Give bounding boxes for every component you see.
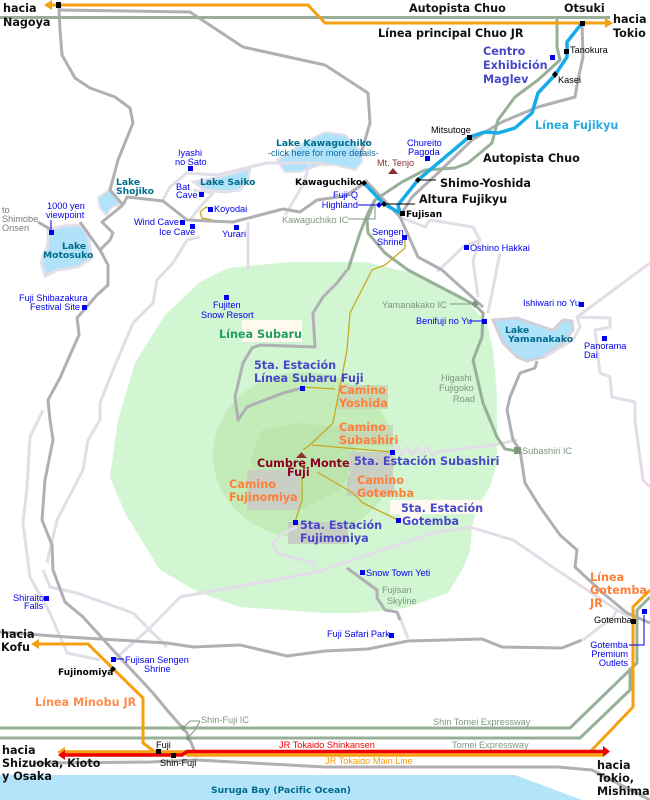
Tokaido Shinkansen bbox=[58, 746, 610, 760]
hacia Tokio top: Tokio bbox=[613, 27, 646, 40]
5ta Subaru: 5ta. Estación bbox=[254, 359, 336, 372]
icon: Tanokura station bbox=[564, 49, 569, 54]
Shin Tomei Expressway: Shin Tomei Expressway bbox=[433, 717, 531, 727]
Fuji foothills green area bbox=[110, 262, 497, 613]
leader lines bbox=[51, 180, 644, 738]
Autopista Chuo top: Autopista Chuo bbox=[409, 2, 506, 15]
Camino Gotemba: Gotemba bbox=[357, 487, 414, 500]
Lake Motosuko: Motosuko bbox=[43, 250, 93, 261]
Bat Cave: Bat bbox=[176, 182, 190, 192]
Fujisan Skyline: Skyline bbox=[387, 596, 417, 606]
Sengen Shrine: Shrine bbox=[377, 237, 404, 247]
Kawaguchiko IC: Kawaguchiko IC bbox=[282, 215, 349, 225]
Fujiten: Fujiten bbox=[213, 300, 241, 310]
Shin-Fuji station: Shin-Fuji bbox=[160, 758, 196, 768]
Linea Gotemba: Gotemba bbox=[590, 584, 647, 597]
Lake Yamanakako: Lake bbox=[505, 325, 529, 336]
Linea Fujikyu: Línea Fujikyu bbox=[535, 119, 618, 132]
Yurari: Yurari bbox=[222, 229, 246, 239]
Higashi Fujigoko Road: Road bbox=[453, 394, 475, 404]
Lake Yamanakako: Yamanakako bbox=[507, 334, 573, 345]
lake Kawaguchiko bbox=[277, 132, 362, 172]
Subashiri IC: Subashiri IC bbox=[522, 446, 572, 456]
5ta Gotemba: 5ta. Estación bbox=[401, 502, 483, 515]
Fujisan Skyline: Fujisan bbox=[382, 585, 412, 595]
icon: Mitsutoge station bbox=[467, 135, 472, 140]
Gotemba Premium Outlets: Gotemba bbox=[590, 640, 629, 650]
Ice Cave: Ice Cave bbox=[159, 227, 195, 237]
Chureito Pagoda: Chureito bbox=[407, 138, 442, 148]
Panorama Dai: Panorama bbox=[584, 341, 627, 351]
hacia Tokio top: hacia bbox=[613, 13, 647, 26]
icon: Gotemba station bbox=[631, 619, 636, 624]
hacia Kofu: hacia bbox=[1, 628, 35, 641]
Fujikyu line bbox=[364, 23, 582, 213]
icon: Fujisan station bbox=[400, 211, 405, 216]
labels: places bbox=[2, 138, 629, 766]
Linea Gotemba: JR bbox=[589, 597, 603, 610]
lake Yamanakako bbox=[493, 318, 573, 361]
Lake Shojiko: Shojiko bbox=[116, 186, 154, 197]
Fuji Shibazakura: Fuji Shibazakura bbox=[19, 293, 88, 303]
Camino Fujinomiya: Camino bbox=[229, 478, 276, 491]
Sengen Shrine: Sengen bbox=[372, 227, 404, 237]
hacia Shizuoka: Shizuoka, Kioto bbox=[2, 757, 101, 770]
Tanokura station: Tanokura bbox=[570, 45, 609, 55]
Shin-Fuji IC: Shin-Fuji IC bbox=[201, 715, 249, 725]
Camino Fujinomiya: Fujinomiya bbox=[229, 491, 298, 504]
Benifuji no Yu: Benifuji no Yu bbox=[416, 316, 472, 326]
Cumbre Monte Fuji: Fuji bbox=[287, 466, 310, 479]
icon: Mt. Tenjo peak bbox=[388, 168, 398, 174]
Altura Fujikyu: Altura Fujikyu bbox=[419, 193, 507, 206]
Fuji Safari Park: Fuji Safari Park bbox=[327, 629, 390, 639]
Lake Shojiko: Lake bbox=[116, 177, 140, 188]
hacia Shizuoka: y Osaka bbox=[2, 770, 52, 783]
Shiraito Falls: Shiraito bbox=[13, 593, 44, 603]
label background patches bbox=[242, 320, 483, 544]
Iyashi no Sato: Iyashi bbox=[178, 148, 202, 158]
JR Tokaido Shinkansen: JR Tokaido Shinkansen bbox=[279, 740, 375, 750]
hacia Tokio Mishima: hacia bbox=[597, 759, 631, 772]
Camino Subashiri: Camino bbox=[339, 421, 386, 434]
Bat Cave: Cave bbox=[176, 190, 197, 200]
Linea principal Chuo: Línea principal Chuo JR bbox=[378, 27, 524, 40]
labels: road names bbox=[201, 215, 572, 750]
hacia Nagoya: Nagoya bbox=[3, 16, 50, 29]
Higashi Fujigoko Road: Higashi bbox=[441, 373, 472, 383]
hacia Kofu: Kofu bbox=[1, 641, 30, 654]
hiking trails bbox=[200, 207, 405, 522]
Gotemba station: Gotemba bbox=[594, 615, 633, 625]
Lake Kawaguchiko: Lake Kawaguchiko bbox=[276, 138, 372, 149]
hacia Shizuoka: hacia bbox=[2, 744, 36, 757]
Higashi Fujigoko Road: Fujigoko bbox=[439, 383, 474, 393]
hacia Tokio Mishima: Mishima bbox=[597, 785, 650, 798]
Linea Gotemba: Línea bbox=[590, 571, 624, 584]
lake Saiko bbox=[194, 168, 250, 192]
icon: black diamonds bbox=[110, 71, 558, 672]
Suruga Bay water bbox=[0, 775, 582, 800]
Chureito Pagoda: Pagoda bbox=[408, 147, 441, 157]
summit zone bbox=[250, 423, 358, 510]
icon: blue diamond bbox=[376, 202, 382, 208]
Mitsutoge station: Mitsutoge bbox=[431, 125, 471, 135]
Gotemba Premium Outlets: Outlets bbox=[599, 658, 628, 668]
Suruga Bay: Suruga Bay (Pacific Ocean) bbox=[211, 785, 351, 796]
Chuo JR main line bbox=[44, 0, 613, 28]
1000 yen viewpoint: viewpoint bbox=[46, 210, 85, 220]
Panorama Dai: Dai bbox=[584, 350, 598, 360]
labels: stations bbox=[58, 45, 633, 768]
Yamanakako IC: Yamanakako IC bbox=[382, 300, 447, 310]
icon: blue place markers bbox=[44, 55, 647, 662]
Otsuki: Otsuki bbox=[564, 2, 605, 15]
labels: lakes bbox=[43, 138, 573, 796]
JR Tokaido Main Line: JR Tokaido Main Line bbox=[325, 756, 413, 766]
Wind Cave: Wind Cave bbox=[134, 217, 179, 227]
Tokaido main line bbox=[57, 747, 604, 757]
5ta Gotemba: Gotemba bbox=[402, 515, 459, 528]
Snow Town Yeti: Snow Town Yeti bbox=[366, 568, 430, 578]
Lake Saiko: Lake Saiko bbox=[200, 177, 256, 188]
5ta Subashiri: 5ta. Estación Subashiri bbox=[354, 455, 499, 468]
to Shimobe Onsen: Onsen bbox=[2, 223, 29, 233]
Fujiten: Snow Resort bbox=[201, 310, 254, 320]
Mt Tenjo: Mt. Tenjo bbox=[377, 158, 414, 168]
Centro Maglev: Maglev bbox=[483, 73, 529, 86]
Shiraito Falls: Falls bbox=[24, 601, 44, 611]
Fujisan Sengen Shrine: Fujisan Sengen bbox=[125, 655, 189, 665]
Fujisan station: Fujisan bbox=[406, 210, 442, 220]
Oshino Hakkai: Oshino Hakkai bbox=[470, 243, 530, 253]
Kasei station: Kasei bbox=[558, 75, 581, 85]
to Shimobe Onsen: Shimobe bbox=[2, 214, 38, 224]
hacia Nagoya: hacia bbox=[3, 2, 37, 15]
Shimo-Yoshida: Shimo-Yoshida bbox=[440, 177, 531, 190]
icon: Otsuki station bbox=[580, 21, 585, 26]
Fujisan Sengen Shrine: Shrine bbox=[144, 664, 171, 674]
Camino Gotemba: Camino bbox=[357, 474, 404, 487]
icon: IC markers bbox=[180, 300, 521, 741]
lake Shojiko bbox=[98, 189, 120, 215]
Cumbre Monte Fuji: Cumbre Monte bbox=[257, 457, 350, 470]
Ishiwari no Yu: Ishiwari no Yu bbox=[523, 298, 580, 308]
Fujinomiya station: Fujinomiya bbox=[58, 668, 113, 678]
Camino Yoshida: Camino bbox=[339, 384, 386, 397]
Centro Maglev: Centro bbox=[483, 45, 526, 58]
to Shimobe Onsen: to bbox=[2, 205, 10, 215]
Autopista Chuo lower: Autopista Chuo bbox=[483, 152, 580, 165]
Fuji-Q Highland: Highland bbox=[322, 200, 358, 210]
icon: Nagoya line square bbox=[56, 2, 61, 8]
Fuji Shibazakura: Festival Site bbox=[30, 302, 80, 312]
Lake Motosuko: Lake bbox=[62, 241, 86, 252]
Centro Maglev: Exhibición bbox=[483, 59, 548, 72]
minor roads bbox=[23, 163, 650, 660]
Camino Subashiri: Subashiri bbox=[339, 434, 398, 447]
5ta Fujinomiya: 5ta. Estación bbox=[300, 519, 382, 532]
icon: Fuji summit bbox=[296, 452, 307, 458]
Gotemba JR line bbox=[590, 590, 650, 752]
Gotemba Premium Outlets: Premium bbox=[591, 649, 628, 659]
icon: Fuji station bbox=[156, 749, 161, 754]
Camino Yoshida: Yoshida bbox=[338, 397, 388, 410]
Iyashi no Sato: no Sato bbox=[175, 157, 207, 167]
1000 yen viewpoint: 1000 yen bbox=[47, 201, 85, 211]
Kawaguchiko station: Kawaguchiko bbox=[295, 178, 362, 188]
labels: fifth stations and trails bbox=[229, 359, 499, 545]
hacia Tokio Mishima: Tokio, bbox=[597, 772, 634, 785]
lake Motosuko bbox=[41, 225, 92, 276]
Fuji station: Fuji bbox=[156, 740, 171, 750]
Fuji-Q Highland: Fuji-Q bbox=[333, 190, 358, 200]
5ta Subaru: Línea Subaru Fuji bbox=[254, 372, 364, 385]
5ta Fujinomiya: Fujimoniya bbox=[300, 532, 369, 545]
Linea Minobu: Línea Minobu JR bbox=[35, 696, 137, 709]
icon: Shin-Fuji station bbox=[171, 753, 176, 758]
Koyodai: Koyodai bbox=[214, 204, 247, 214]
click here: -click here for more details- bbox=[268, 148, 379, 158]
Minobu JR line bbox=[31, 639, 155, 752]
Tomei Expressway: Tomei Expressway bbox=[452, 740, 529, 750]
Linea Subaru: Línea Subaru bbox=[219, 328, 302, 341]
upper slopes darker green area bbox=[213, 372, 395, 538]
